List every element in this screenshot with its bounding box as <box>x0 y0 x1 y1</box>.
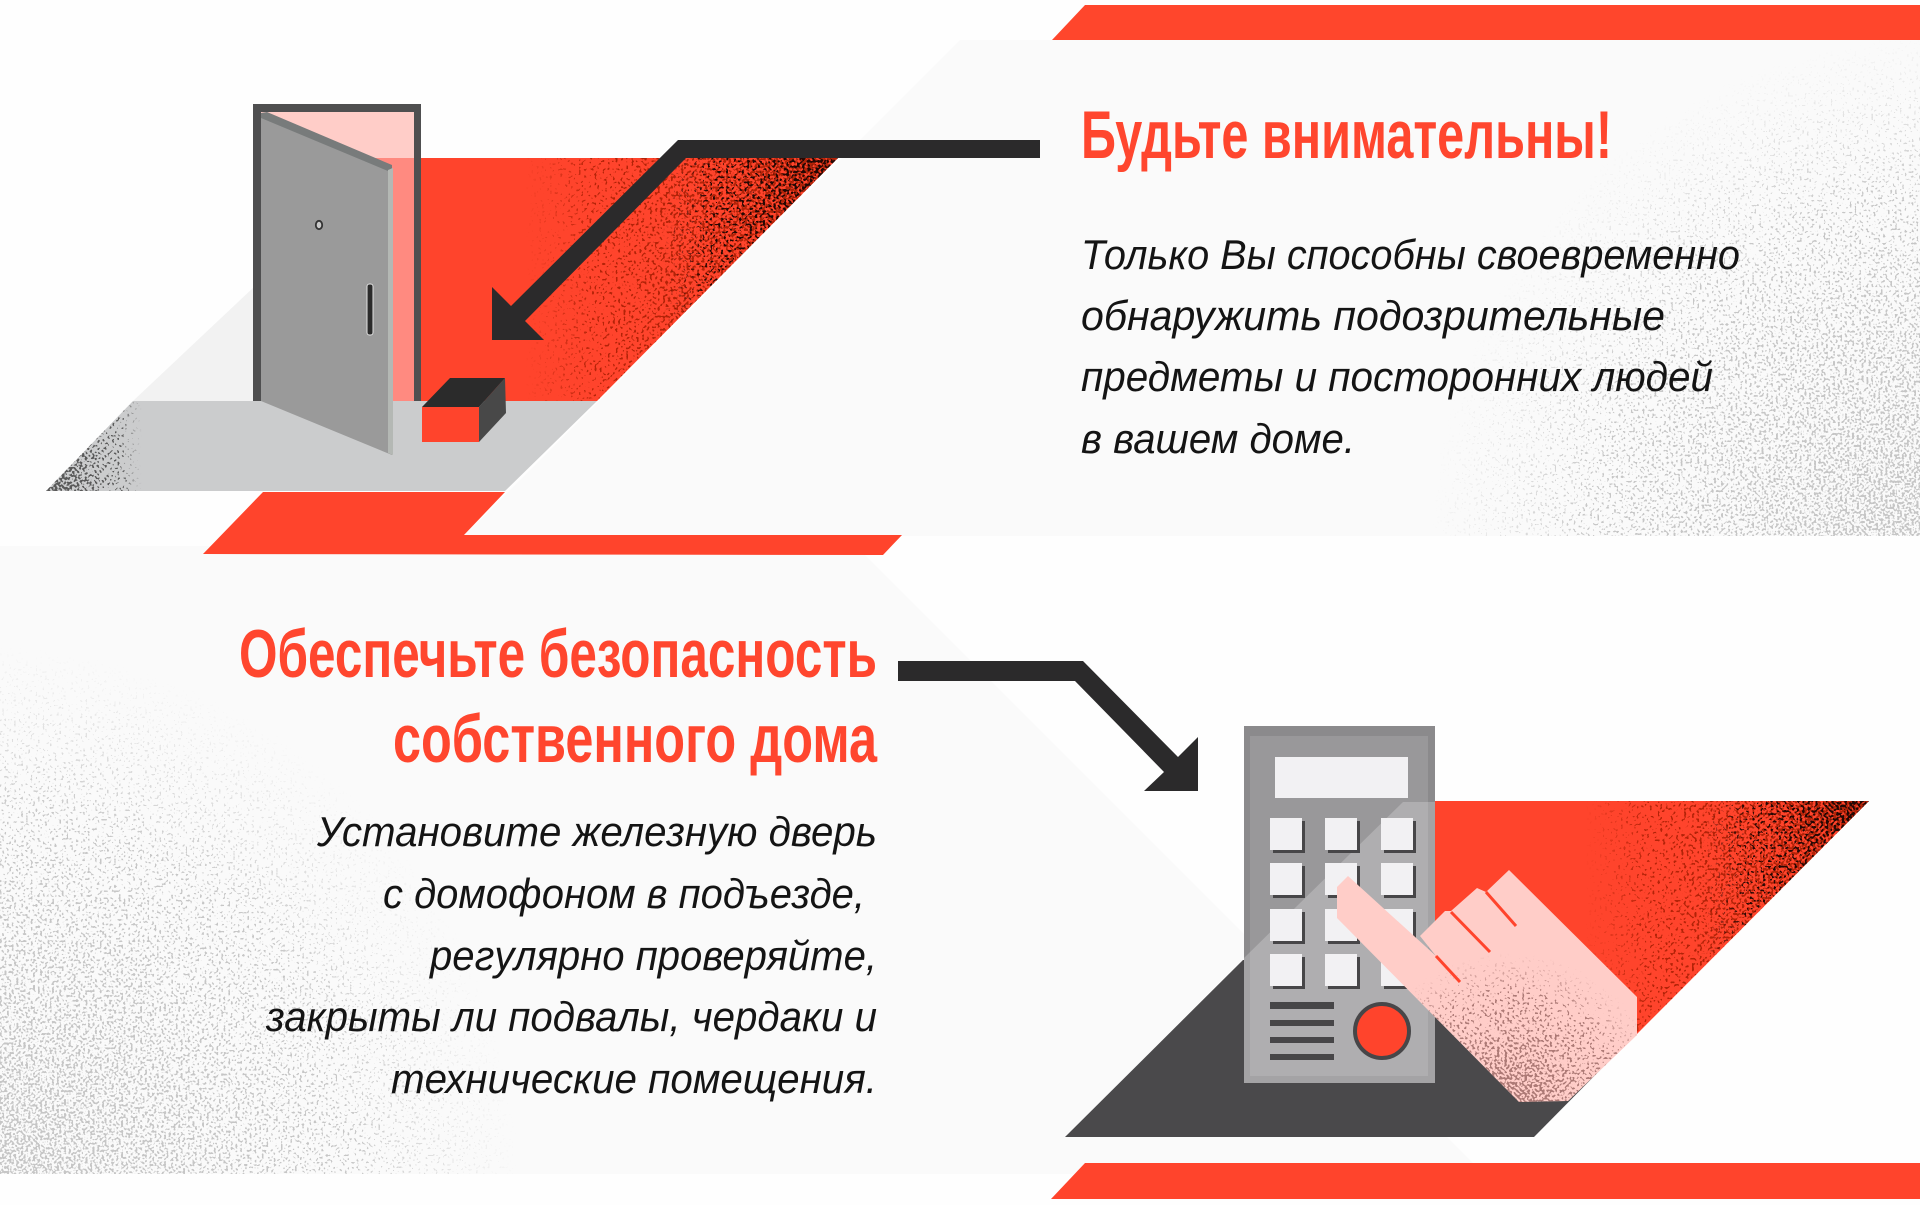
red wall with stippling <box>421 158 841 403</box>
text block: home security: с домофоном в подъезде, <box>383 870 865 917</box>
illustration: door with suspicious box <box>40 104 902 555</box>
peephole <box>316 221 322 229</box>
text block: be careful: предметы и посторонних людей <box>1081 353 1713 400</box>
text block: home security: Установите железную дверь <box>316 808 877 855</box>
hand <box>1337 870 1640 1103</box>
intercom panel <box>1244 726 1435 1083</box>
top red strip <box>1052 5 1920 40</box>
speaker lines <box>1270 1002 1334 1060</box>
handle <box>367 284 373 335</box>
door leaf <box>261 112 393 455</box>
bottom red strip <box>1051 1163 1920 1199</box>
text block: be careful <box>1081 231 1740 462</box>
heading: Будьте внимательны!: Будьте внимательны! <box>1081 97 1612 173</box>
text block: be careful: в вашем доме. <box>1081 415 1355 462</box>
red wall with stippling <box>1434 801 1870 1037</box>
suspicious box <box>422 378 506 442</box>
text block: home security: закрыты ли подвалы, чердаки и <box>265 993 877 1040</box>
dark floor <box>1065 960 1620 1137</box>
arrow: to the door <box>492 140 1040 340</box>
panel: warning text background <box>1446 50 1920 536</box>
text block: home security: технические помещения. <box>391 1055 877 1102</box>
heading: Обеспечьте безопасность собственного дома: Обеспечьте безопасность <box>239 616 877 692</box>
panel: home security text background <box>0 661 505 1174</box>
grey floor <box>40 401 597 491</box>
intercom screen <box>1275 757 1408 798</box>
call button <box>1355 1004 1409 1058</box>
heading: Обеспечьте безопасность собственного дома: собственного дома <box>393 701 878 777</box>
illustration: intercom and hand <box>1065 726 1870 1137</box>
text block: home security: регулярно проверяйте, <box>428 932 877 979</box>
red base <box>203 492 902 555</box>
heading: Обеспечьте безопасность собственного дома <box>239 616 878 777</box>
text block: be careful: обнаружить подозрительные <box>1081 292 1665 339</box>
text block: home security <box>265 808 877 1102</box>
text block: be careful: Только Вы способны своевременно <box>1081 231 1740 278</box>
light wall <box>133 287 254 401</box>
keypad buttons <box>1270 818 1416 989</box>
door frame <box>253 104 421 401</box>
finger lines <box>1436 892 1516 982</box>
arrow: to the intercom <box>898 661 1198 791</box>
